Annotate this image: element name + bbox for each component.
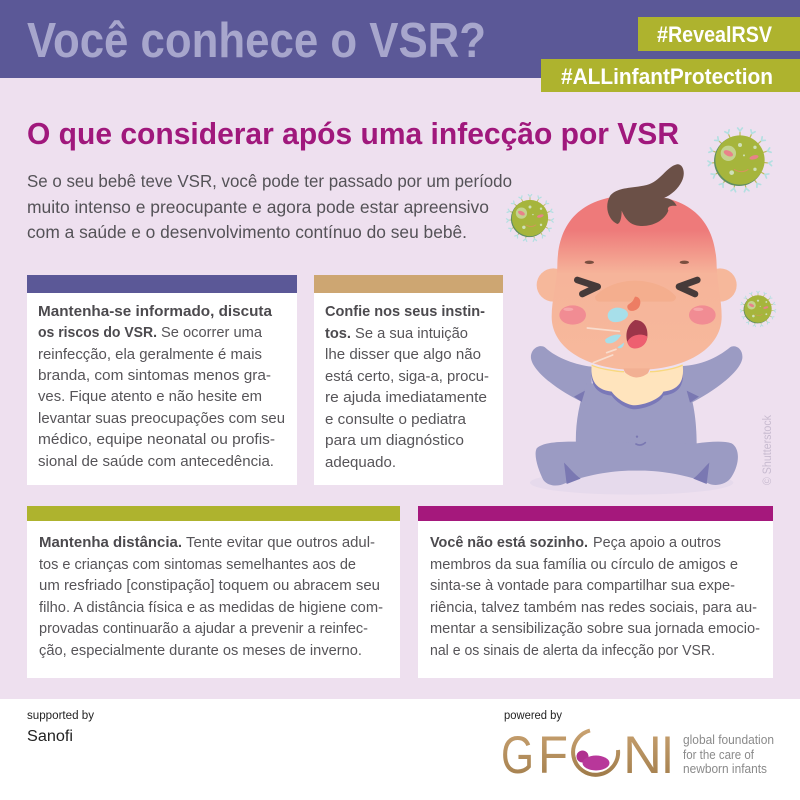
panel: keep distance: filho. A distância física e as medidas de higiene com- xyxy=(39,600,383,616)
panel: stay informed xyxy=(27,275,297,485)
panel: you are not alone: riência, talvez também nas redes sociais, para au- xyxy=(430,600,757,616)
logo: GFCNI: G xyxy=(501,726,534,785)
panel: keep distance: tos e crianças com sintomas semelhantes aos de xyxy=(39,557,356,573)
header band xyxy=(0,0,800,78)
intro text xyxy=(27,171,512,242)
panel: trust your instincts: re ajuda imediatamente xyxy=(325,390,487,406)
panel: trust your instincts: lhe disser que algo não xyxy=(325,347,481,363)
panel: you are not alone: sinta-se à vontade para compartilhar sua expe- xyxy=(430,578,735,594)
panel: stay informed: os riscos do VSR. xyxy=(38,325,157,341)
panel: stay informed: Mantenha-se informado, discuta xyxy=(38,304,273,320)
panel: you are not alone: membros da sua família ou círculo de amigos e xyxy=(430,557,738,573)
icon: large virus xyxy=(708,128,772,192)
panel: you are not alone: Peça apoio a outros xyxy=(593,535,721,551)
panel: keep distance: provadas continuarão a ajudar a prevenir a reinfec- xyxy=(39,621,368,637)
hashtag: ALLinfantProtection: #ALLinfantProtection xyxy=(561,64,773,89)
panel: trust your instincts xyxy=(314,275,503,485)
logo tagline: global foundation xyxy=(683,733,774,747)
supporter: Sanofi xyxy=(27,728,73,745)
panel: you are not alone: nal e os sinais de alerta da infecção por VSR. xyxy=(430,643,715,659)
logo: GFCNI: F xyxy=(538,726,568,785)
panel: trust your instincts: está certo, siga-a, procu- xyxy=(325,369,489,385)
panel: trust your instincts: tos. xyxy=(325,326,351,342)
panel: stay informed: médico, equipe neonatal ou profis- xyxy=(38,432,275,448)
hashtag: RevealRSV xyxy=(638,17,800,51)
logo: GFCNI xyxy=(501,726,674,785)
panel: stay informed: sional de saúde com antecedência. xyxy=(38,454,274,470)
panel: you are not alone: mentar a sensibilização sobre sua jornada emocio- xyxy=(430,621,760,637)
title: Você conhece o VSR? xyxy=(27,14,486,68)
panel: keep distance: Tente evitar que outros adul- xyxy=(186,535,375,551)
panel: you are not alone: Você não está sozinho. xyxy=(430,535,588,551)
intro text: muito intenso e preocupante e agora pode estar apreensivo xyxy=(27,197,489,217)
intro text: Se o seu bebê teve VSR, você pode ter passado por um período xyxy=(27,171,512,191)
illustration: sneezing baby xyxy=(530,164,742,495)
powered by: powered by xyxy=(504,710,562,722)
logo: GFCNI: I xyxy=(661,726,674,785)
panel: stay informed: branda, com sintomas menos gra- xyxy=(38,368,271,384)
image credit: © Shutterstock xyxy=(762,415,774,485)
panel: keep distance: um resfriado [constipação] toquem ou abracem seu xyxy=(39,578,380,594)
panel: trust your instincts: Confie nos seus instin- xyxy=(325,304,485,320)
panel: you are not alone xyxy=(418,506,773,678)
logo: GFCNI: N xyxy=(623,726,662,785)
icon: right virus xyxy=(740,291,776,327)
intro text: com a saúde e o desenvolvimento contínuo do seu bebê. xyxy=(27,222,467,242)
panel: trust your instincts: adequado. xyxy=(325,455,396,471)
hashtag: RevealRSV: #RevealRSV xyxy=(657,22,772,47)
panel: stay informed: levantar suas preocupações com seu xyxy=(38,411,285,427)
logo tagline xyxy=(683,733,774,776)
footer xyxy=(0,699,800,800)
panel: trust your instincts: e consulte o pediatra xyxy=(325,412,467,428)
panel: stay informed: reinfecção, ela geralmente é mais xyxy=(38,347,262,363)
panel: keep distance: ção, especialmente durante os meses de inverno. xyxy=(39,643,362,659)
supporter: supported by xyxy=(27,710,94,722)
hashtag: ALLinfantProtection xyxy=(541,59,800,92)
panel: keep distance xyxy=(27,506,400,678)
panel: stay informed: ves. Fique atento e não hesite em xyxy=(38,389,262,405)
heading: O que considerar após uma infecção por VSR xyxy=(27,116,679,151)
logo tagline: newborn infants xyxy=(683,762,767,776)
panel: stay informed: Se ocorrer uma xyxy=(161,325,263,341)
icon: left virus xyxy=(506,194,554,241)
panel: trust your instincts: para um diagnóstico xyxy=(325,433,464,449)
panel: trust your instincts: Se a sua intuição xyxy=(355,326,468,342)
logo tagline: for the care of xyxy=(683,748,754,762)
panel: keep distance: Mantenha distância. xyxy=(39,535,182,551)
supporter xyxy=(27,710,94,745)
